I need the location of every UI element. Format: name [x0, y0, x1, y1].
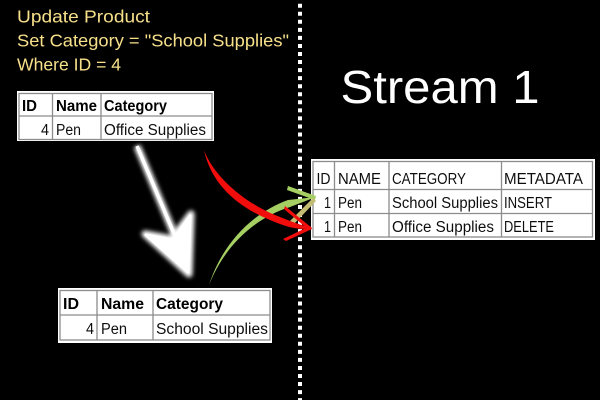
table: stream 1 records [311, 159, 595, 240]
table: updated row: Pen [101, 321, 127, 338]
vertical dotted divider [298, 4, 302, 400]
table: original row: ID [22, 98, 37, 115]
table: stream 1 records: ID [316, 171, 330, 188]
table: stream 1 records: DELETE [504, 219, 554, 236]
table: updated row: 4 [86, 321, 94, 338]
table: updated row: ID [63, 296, 79, 313]
table: updated row: School Supplies [156, 321, 268, 338]
arrow: red delete arrow [204, 150, 312, 241]
table: updated row: Name [101, 296, 144, 313]
table: stream 1 records: INSERT [504, 195, 552, 212]
table: stream 1 records: Pen [338, 195, 362, 212]
table: updated row: Category [156, 296, 223, 313]
table: original row: Office Supplies [104, 122, 206, 139]
table: original row [17, 91, 214, 141]
SQL update statement [17, 6, 289, 74]
table: stream 1 records: NAME [338, 171, 381, 188]
arrow: white glowing update arrow [137, 146, 191, 274]
SQL update statement: Where ID = 4 [17, 54, 121, 74]
heading: Stream 1: Stream 1 [340, 61, 540, 113]
SQL update statement: Update Product [17, 6, 150, 26]
table: original row: Pen [56, 122, 81, 139]
table: stream 1 records: 1 [324, 195, 331, 212]
table: original row: Category [104, 98, 167, 115]
arrow: green insert arrow [209, 186, 316, 285]
table: stream 1 records: 1 [324, 219, 331, 236]
table: stream 1 records: CATEGORY [392, 171, 466, 188]
table: stream 1 records: Pen [338, 219, 362, 236]
table: updated row [58, 288, 272, 343]
table: stream 1 records: METADATA [504, 171, 584, 188]
SQL update statement: Set Category = "School Supplies" [17, 30, 289, 50]
table: stream 1 records: School Supplies [392, 195, 498, 212]
table: stream 1 records: Office Supplies [392, 219, 494, 236]
table: original row: 4 [41, 122, 49, 139]
table: original row: Name [56, 98, 97, 115]
